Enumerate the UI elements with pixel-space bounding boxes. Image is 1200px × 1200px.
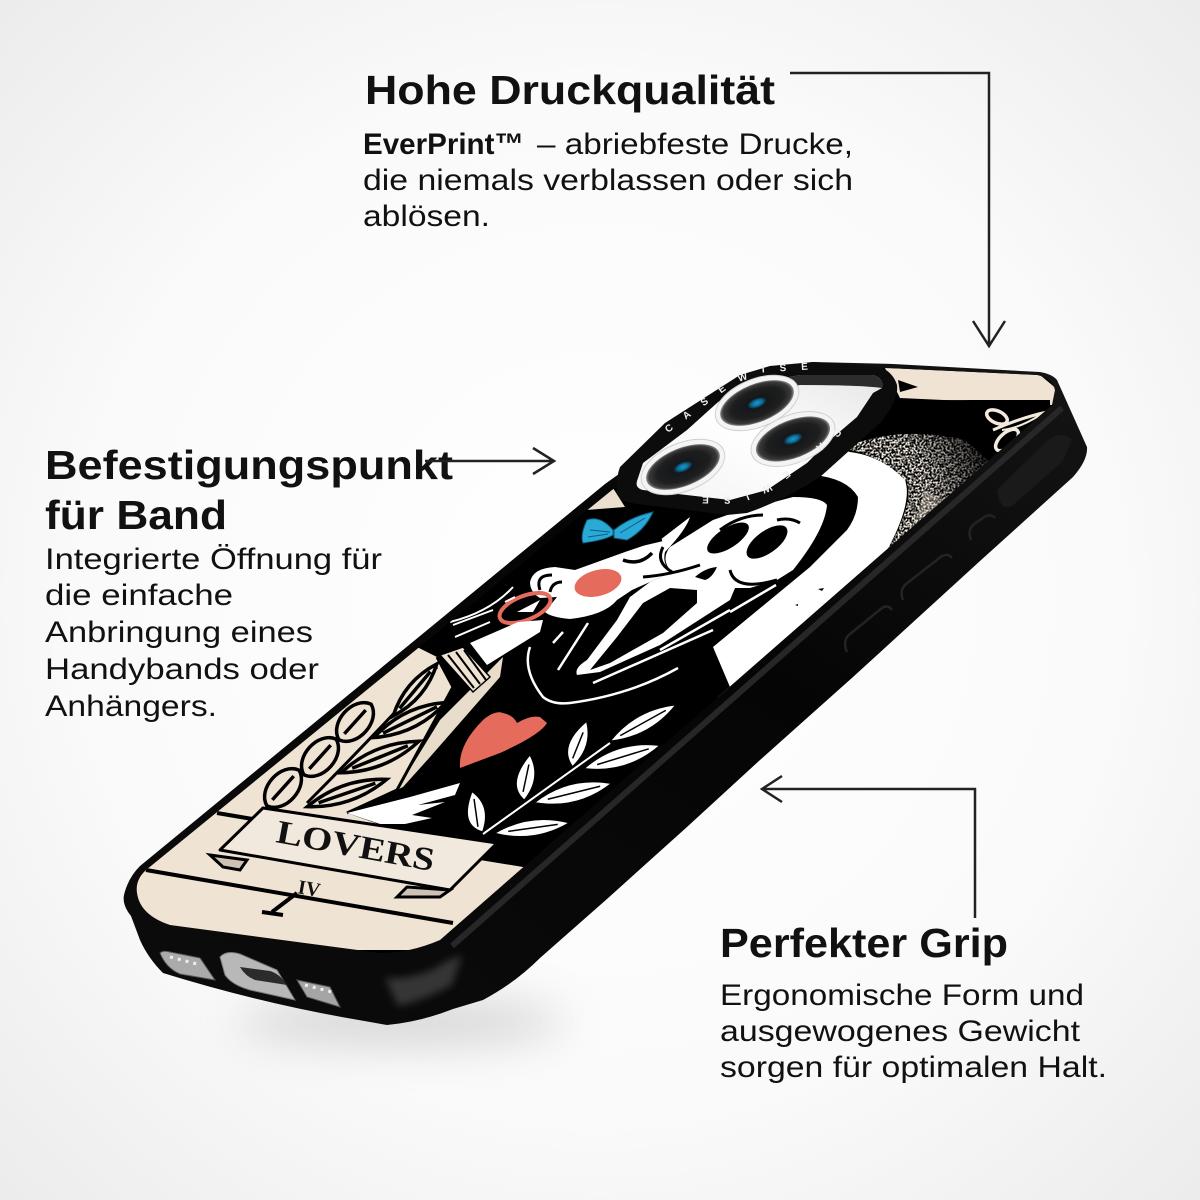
body text: sorgen für optimalen Halt. xyxy=(720,1051,1107,1084)
body text: Ergonomische Form und xyxy=(720,979,1084,1012)
numeral: IV xyxy=(296,876,322,902)
hand xyxy=(347,783,460,824)
heart xyxy=(460,712,547,768)
ring text xyxy=(665,362,841,504)
case body xyxy=(124,362,1087,1025)
side buttons xyxy=(845,515,995,652)
ring text: CASEWISE xyxy=(702,430,841,504)
arrow xyxy=(425,448,554,474)
body text xyxy=(45,543,382,723)
body text: ausgewogenes Gewicht xyxy=(720,1015,1081,1048)
callout: grip xyxy=(720,776,1107,1084)
printed artwork xyxy=(120,360,1080,960)
sleeve wedge xyxy=(397,657,503,790)
arrow xyxy=(790,73,1005,346)
art background xyxy=(358,368,1054,953)
black hood xyxy=(700,476,858,700)
sleeve outline xyxy=(347,657,453,813)
banner label: LOVERS xyxy=(274,814,437,879)
lens right xyxy=(743,401,843,477)
ghost mask xyxy=(576,497,827,675)
lens top xyxy=(707,364,807,442)
body text: Anbringung eines xyxy=(45,616,313,649)
woman face xyxy=(530,517,690,619)
border lines xyxy=(146,813,453,923)
side slab xyxy=(997,435,1072,507)
port: left speaker xyxy=(160,951,215,980)
camera module xyxy=(617,362,898,515)
mask eyes xyxy=(707,522,749,554)
neck xyxy=(470,620,543,665)
top-left cream corner xyxy=(586,488,625,510)
phone case xyxy=(124,362,1087,1025)
white plant xyxy=(468,706,674,836)
closed eye xyxy=(623,553,652,562)
ring text: CASEWISE xyxy=(665,362,808,432)
body text: die einfache xyxy=(45,579,233,612)
heading: für Band xyxy=(45,492,227,538)
mask nose xyxy=(695,567,717,580)
mask mouth xyxy=(590,588,697,670)
lens bottom xyxy=(633,428,733,506)
cuff ribs xyxy=(448,650,486,688)
camera glass xyxy=(637,375,882,500)
earlobe xyxy=(517,600,540,612)
numeral stem xyxy=(262,893,297,915)
specks on white xyxy=(795,588,824,606)
brow xyxy=(642,538,662,546)
arrow xyxy=(762,776,975,918)
white hood xyxy=(713,452,907,698)
robe lines xyxy=(528,585,776,703)
camera inner shade xyxy=(737,375,882,395)
body text: die niemals verblassen oder sich xyxy=(363,164,853,197)
speckled halo xyxy=(850,400,1050,548)
body text: Integrierte Öffnung für xyxy=(45,543,382,576)
body text: – abriebfeste Drucke, xyxy=(537,128,853,161)
butterfly xyxy=(582,512,653,543)
mask brows xyxy=(720,515,800,584)
top cream bar xyxy=(885,368,1058,405)
body text xyxy=(363,128,853,233)
port: charging xyxy=(220,953,295,1000)
body text: Handybands oder xyxy=(45,653,319,686)
cream sleeve and footer xyxy=(136,648,524,950)
camera ring xyxy=(617,362,897,515)
mask crease xyxy=(643,547,700,577)
callout: lanyard attachment xyxy=(45,442,554,723)
phone shadow xyxy=(235,998,565,1046)
sleeve leaves xyxy=(262,662,444,809)
side rim xyxy=(452,408,1062,946)
heading xyxy=(45,442,453,538)
heading: Perfekter Grip xyxy=(720,920,1008,966)
ornament top right xyxy=(984,407,1047,455)
body text: ablösen. xyxy=(363,200,490,233)
heading: Befestigungspunkt xyxy=(45,442,453,488)
sleeve cuff xyxy=(440,647,490,692)
ear detail xyxy=(539,575,562,592)
hair lines xyxy=(450,587,515,637)
thorn xyxy=(898,380,918,392)
callout: print quality xyxy=(363,67,1005,346)
body text xyxy=(720,979,1107,1084)
port: right speaker xyxy=(297,980,340,1007)
banner xyxy=(210,808,497,897)
corner highlight xyxy=(385,955,462,1006)
earring xyxy=(498,591,552,625)
body text: EverPrint™ xyxy=(363,128,524,161)
cheek xyxy=(574,569,622,597)
body text: Anhängers. xyxy=(45,690,217,723)
heading: Hohe Druckqualität xyxy=(365,67,775,113)
